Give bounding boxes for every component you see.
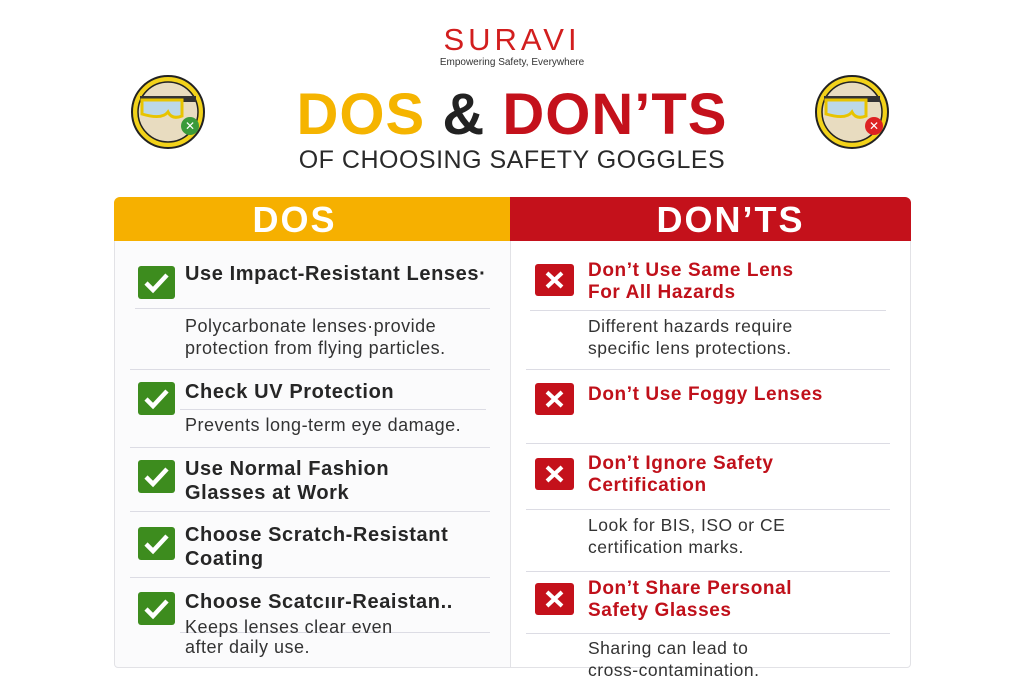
dont item 4: Don’t Share Personal — [588, 578, 792, 599]
dont item 1: For All Hazards — [588, 282, 736, 303]
icon: x — [535, 383, 574, 415]
icon: x — [535, 458, 574, 490]
do item 1: Polycarbonate lenses·provide — [185, 316, 436, 336]
do item 1: Use Impact-Resistant Lenses· — [185, 263, 486, 285]
icon: goggles left — [131, 75, 205, 149]
dont item 3: certification marks. — [588, 537, 744, 557]
panel: dos — [114, 197, 511, 668]
dont item 4: Sharing can lead to — [588, 638, 748, 658]
do item 5: Choose Scatcıır-Reaistan.. — [185, 591, 453, 613]
icon: goggles right: ✕ — [869, 119, 879, 133]
main heading: DOS & DON’TS — [297, 82, 727, 147]
icon: goggles left: ✕ — [185, 119, 195, 133]
icon: check — [138, 460, 175, 493]
dont item 2 — [535, 383, 823, 415]
do item 3: Use Normal Fashion — [185, 458, 389, 480]
tagline: Empowering Safety, Everywhere — [440, 57, 584, 68]
do item 2: Prevents long-term eye damage. — [185, 415, 461, 435]
header: dos — [114, 197, 511, 241]
icon: check — [138, 527, 175, 560]
header: donts: DON’TS — [656, 199, 804, 240]
dont item 4: cross-contamination. — [588, 660, 759, 680]
dont item 3: Don’t Ignore Safety — [588, 453, 774, 474]
dont item 3 — [535, 453, 785, 557]
dont item 1: Different hazards require — [588, 316, 793, 336]
logo: SURAVI — [443, 22, 581, 57]
dont item 1: Don’t Use Same Lens — [588, 260, 794, 281]
do item 5 — [138, 591, 453, 657]
dont item 1: specific lens protections. — [588, 338, 792, 358]
dont item 4: Safety Glasses — [588, 600, 732, 621]
icon: check — [138, 592, 175, 625]
do item 5: Keeps lenses clear even — [185, 617, 393, 637]
icon: x — [535, 583, 574, 615]
do item 3 — [138, 458, 389, 504]
do item 4: Coating — [185, 548, 264, 570]
header: donts — [510, 197, 911, 241]
dont item 3: Look for BIS, ISO or CE — [588, 515, 785, 535]
icon: check — [138, 382, 175, 415]
icon: goggles right — [815, 75, 889, 149]
dont item 4 — [535, 578, 792, 680]
do item 4: Choose Scratch-Resistant — [185, 524, 448, 546]
subheading: OF CHOOSING SAFETY GOGGLES — [299, 146, 725, 174]
do item 3: Glasses at Work — [185, 482, 349, 504]
dont item 3: Certification — [588, 475, 707, 496]
icon: check — [138, 266, 175, 299]
do item 1: protection from flying particles. — [185, 338, 446, 358]
do item 2 — [138, 381, 461, 435]
dont item 1 — [535, 260, 794, 358]
do item 2: Check UV Protection — [185, 381, 394, 403]
icon: x — [535, 264, 574, 296]
header: dos: DOS — [252, 199, 336, 240]
panel: donts — [510, 197, 911, 668]
do item 5: after daily use. — [185, 637, 310, 657]
do item 1 — [138, 263, 486, 358]
dont item 2: Don’t Use Foggy Lenses — [588, 384, 823, 405]
do item 4 — [138, 524, 448, 570]
